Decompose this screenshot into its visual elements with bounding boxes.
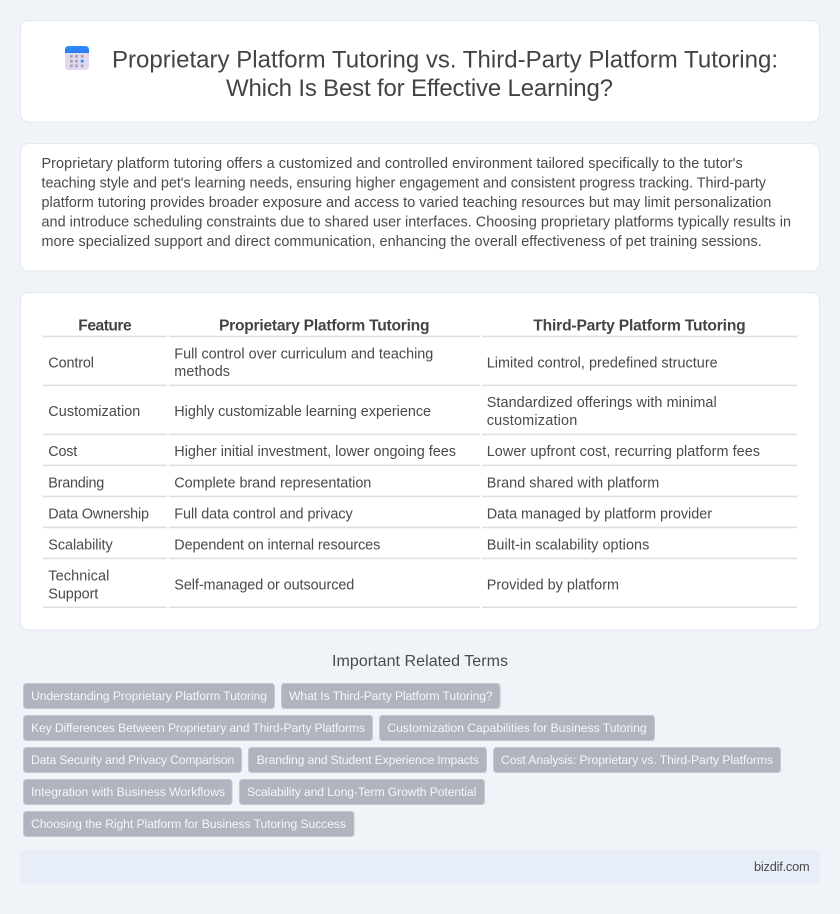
- intro paragraph: teaching style and pet's learning needs, ensuring higher engagement and consistent progress tracking. Third-party: [42, 176, 767, 192]
- tag: What Is Third-Party Platform Tutoring?: [289, 689, 493, 703]
- intro paragraph: more specialized support and direct communication, enhancing the overall effectiveness of pet training sessions.: [42, 234, 762, 250]
- row: scalability: [43, 537, 797, 559]
- tag: Key Differences Between Proprietary and Third-Party Platforms: [31, 721, 365, 735]
- row: data ownership: [43, 506, 797, 528]
- row: data ownership: Full data control and privacy: [174, 506, 353, 522]
- row: cost: [43, 444, 797, 466]
- row: control: methods: [174, 364, 230, 380]
- row: branding: [43, 475, 797, 497]
- intro paragraph: and introduce scheduling constraints due to shared user interfaces. Choosing proprietary platforms typically results in: [42, 214, 791, 230]
- row: scalability: Dependent on internal resources: [174, 537, 380, 553]
- tag: [24, 812, 354, 836]
- row: data ownership: Data managed by platform provider: [487, 506, 712, 522]
- row: customization: customization: [487, 413, 577, 429]
- table header row: Feature: [78, 318, 132, 335]
- row: scalability: Built-in scalability options: [487, 537, 649, 553]
- tag: [248, 748, 486, 772]
- row: customization: [43, 395, 797, 435]
- tag: Cost Analysis: Proprietary vs. Third-Party Platforms: [501, 753, 773, 767]
- table header row: Proprietary Platform Tutoring: [219, 318, 430, 335]
- row: customization: Standardized offerings with minimal: [487, 395, 717, 411]
- row: branding: Complete brand representation: [174, 475, 371, 491]
- footer bar: [20, 850, 820, 884]
- tag: Choosing the Right Platform for Business Tutoring Success: [31, 817, 346, 831]
- tag: Integration with Business Workflows: [31, 785, 225, 799]
- tag: [24, 684, 274, 708]
- tag: [24, 780, 232, 804]
- row: scalability: Scalability: [48, 537, 113, 553]
- intro paragraph: [42, 156, 791, 250]
- table header row: [43, 318, 797, 337]
- tag: [282, 684, 500, 708]
- tag: Branding and Student Experience Impacts: [257, 753, 479, 767]
- row: cost: Cost: [48, 444, 77, 460]
- intro paragraph: platform tutoring provides broader exposure and access to varied teaching resources but may limit personalization: [42, 195, 771, 211]
- tag: [494, 748, 780, 772]
- title: Which Is Best for Effective Learning?: [226, 75, 613, 102]
- row: data ownership: Data Ownership: [48, 506, 149, 522]
- tag: Scalability and Long-Term Growth Potential: [247, 785, 476, 799]
- title: Proprietary Platform Tutoring vs. Third-Party Platform Tutoring:: [112, 46, 778, 74]
- row: control: Full control over curriculum and teaching: [174, 346, 433, 362]
- intro paragraph: Proprietary platform tutoring offers a customized and controlled environment tailored specifically to the tutor's: [42, 156, 743, 172]
- tag: Customization Capabilities for Business Tutoring: [387, 721, 647, 735]
- row: technical support: Provided by platform: [487, 577, 619, 593]
- footer site name: bizdif.com: [754, 859, 810, 874]
- row: cost: Higher initial investment, lower ongoing fees: [174, 444, 456, 460]
- row: control: [43, 346, 797, 386]
- tag: Understanding Proprietary Platform Tutoring: [31, 689, 267, 703]
- related term tags: [24, 684, 780, 836]
- row: technical support: [43, 568, 797, 608]
- tag: [24, 716, 372, 740]
- table header row: Third-Party Platform Tutoring: [533, 318, 746, 335]
- row: cost: Lower upfront cost, recurring platform fees: [487, 444, 760, 460]
- row: branding: Brand shared with platform: [487, 475, 659, 491]
- row: customization: Customization: [48, 404, 140, 420]
- icon: calendar: [65, 46, 89, 70]
- row: branding: Branding: [48, 475, 104, 491]
- panel: title card: [20, 20, 820, 122]
- tag: [380, 716, 654, 740]
- row: customization: Highly customizable learning experience: [174, 404, 431, 420]
- tag: [240, 780, 484, 804]
- heading: important related terms: Important Related Terms: [332, 653, 508, 670]
- tag: [24, 748, 242, 772]
- row: control: Control: [48, 355, 94, 371]
- row: technical support: Support: [48, 586, 98, 602]
- panel: intro text: [20, 144, 820, 271]
- row: control: Limited control, predefined structure: [487, 355, 718, 371]
- panel: comparison table: [20, 292, 820, 630]
- row: technical support: Self-managed or outsourced: [174, 577, 354, 593]
- title: [112, 46, 778, 102]
- tag: Data Security and Privacy Comparison: [31, 753, 234, 767]
- row: technical support: Technical: [48, 568, 109, 584]
